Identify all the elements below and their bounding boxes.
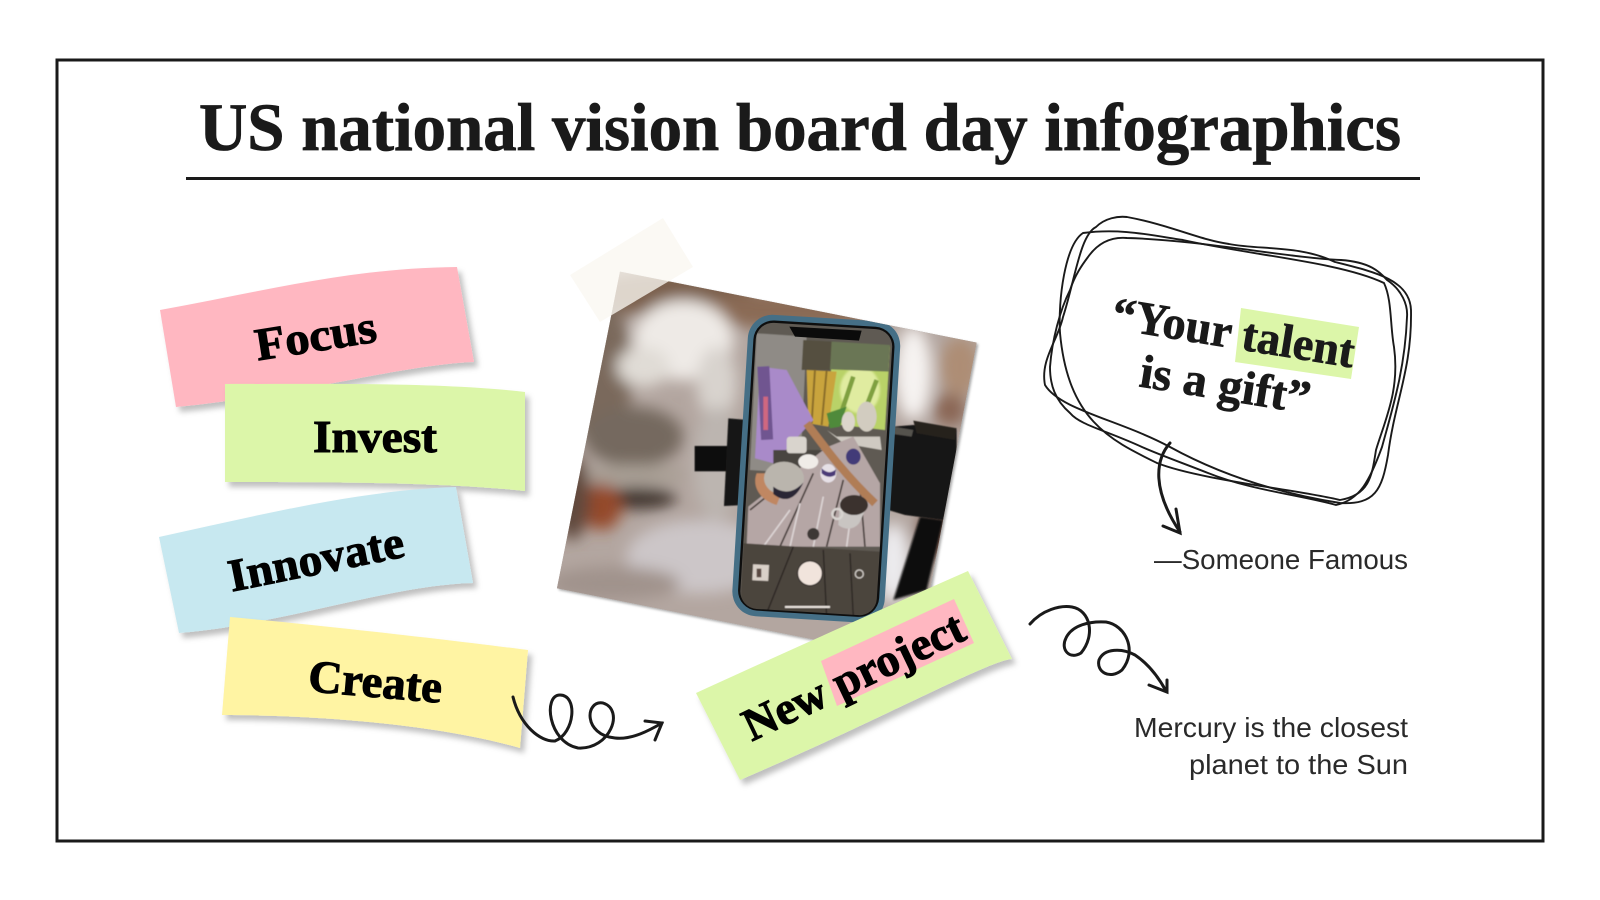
quote text: “Your talent bbox=[1108, 288, 1359, 378]
highlight: talent bbox=[1235, 308, 1359, 379]
quote text: is a gift” bbox=[1136, 346, 1314, 425]
note: Innovate: Innovate bbox=[224, 516, 408, 601]
quote scribble frame bbox=[1044, 217, 1411, 505]
tape bbox=[570, 218, 693, 322]
note: New project: New project bbox=[734, 601, 973, 751]
description bbox=[1134, 712, 1408, 780]
right clamp bbox=[888, 421, 957, 520]
note: Innovate bbox=[159, 487, 473, 633]
note: Invest bbox=[225, 384, 525, 491]
arrow: curly from Create to New project bbox=[513, 695, 662, 748]
attribution: —Someone Famous bbox=[1154, 544, 1408, 575]
note: Focus bbox=[160, 267, 474, 407]
blurred photo background bbox=[557, 272, 976, 640]
title: US national vision board day infographics bbox=[199, 89, 1401, 165]
note: New project bbox=[696, 571, 1012, 780]
note: Invest: Invest bbox=[313, 411, 438, 462]
note: Focus: Focus bbox=[251, 301, 380, 370]
description: Mercury is the closest bbox=[1134, 712, 1408, 743]
phone notch bbox=[789, 327, 862, 341]
title underline bbox=[186, 177, 1420, 180]
highlight: project bbox=[821, 599, 974, 706]
description: planet to the Sun bbox=[1189, 749, 1408, 780]
note: Create: Create bbox=[306, 650, 444, 713]
photo: phone on tripod filming a table bbox=[557, 272, 980, 642]
quote text bbox=[1108, 288, 1359, 425]
photo drop shadow bbox=[557, 272, 977, 660]
left clamp bbox=[695, 418, 748, 506]
phone bbox=[727, 310, 907, 630]
arrow: curly from New project to description bbox=[1030, 607, 1167, 692]
camera screen bbox=[740, 322, 892, 616]
tripod stand bbox=[893, 517, 943, 600]
arrow: quote to attribution bbox=[1159, 443, 1180, 533]
note: Create bbox=[222, 617, 528, 748]
